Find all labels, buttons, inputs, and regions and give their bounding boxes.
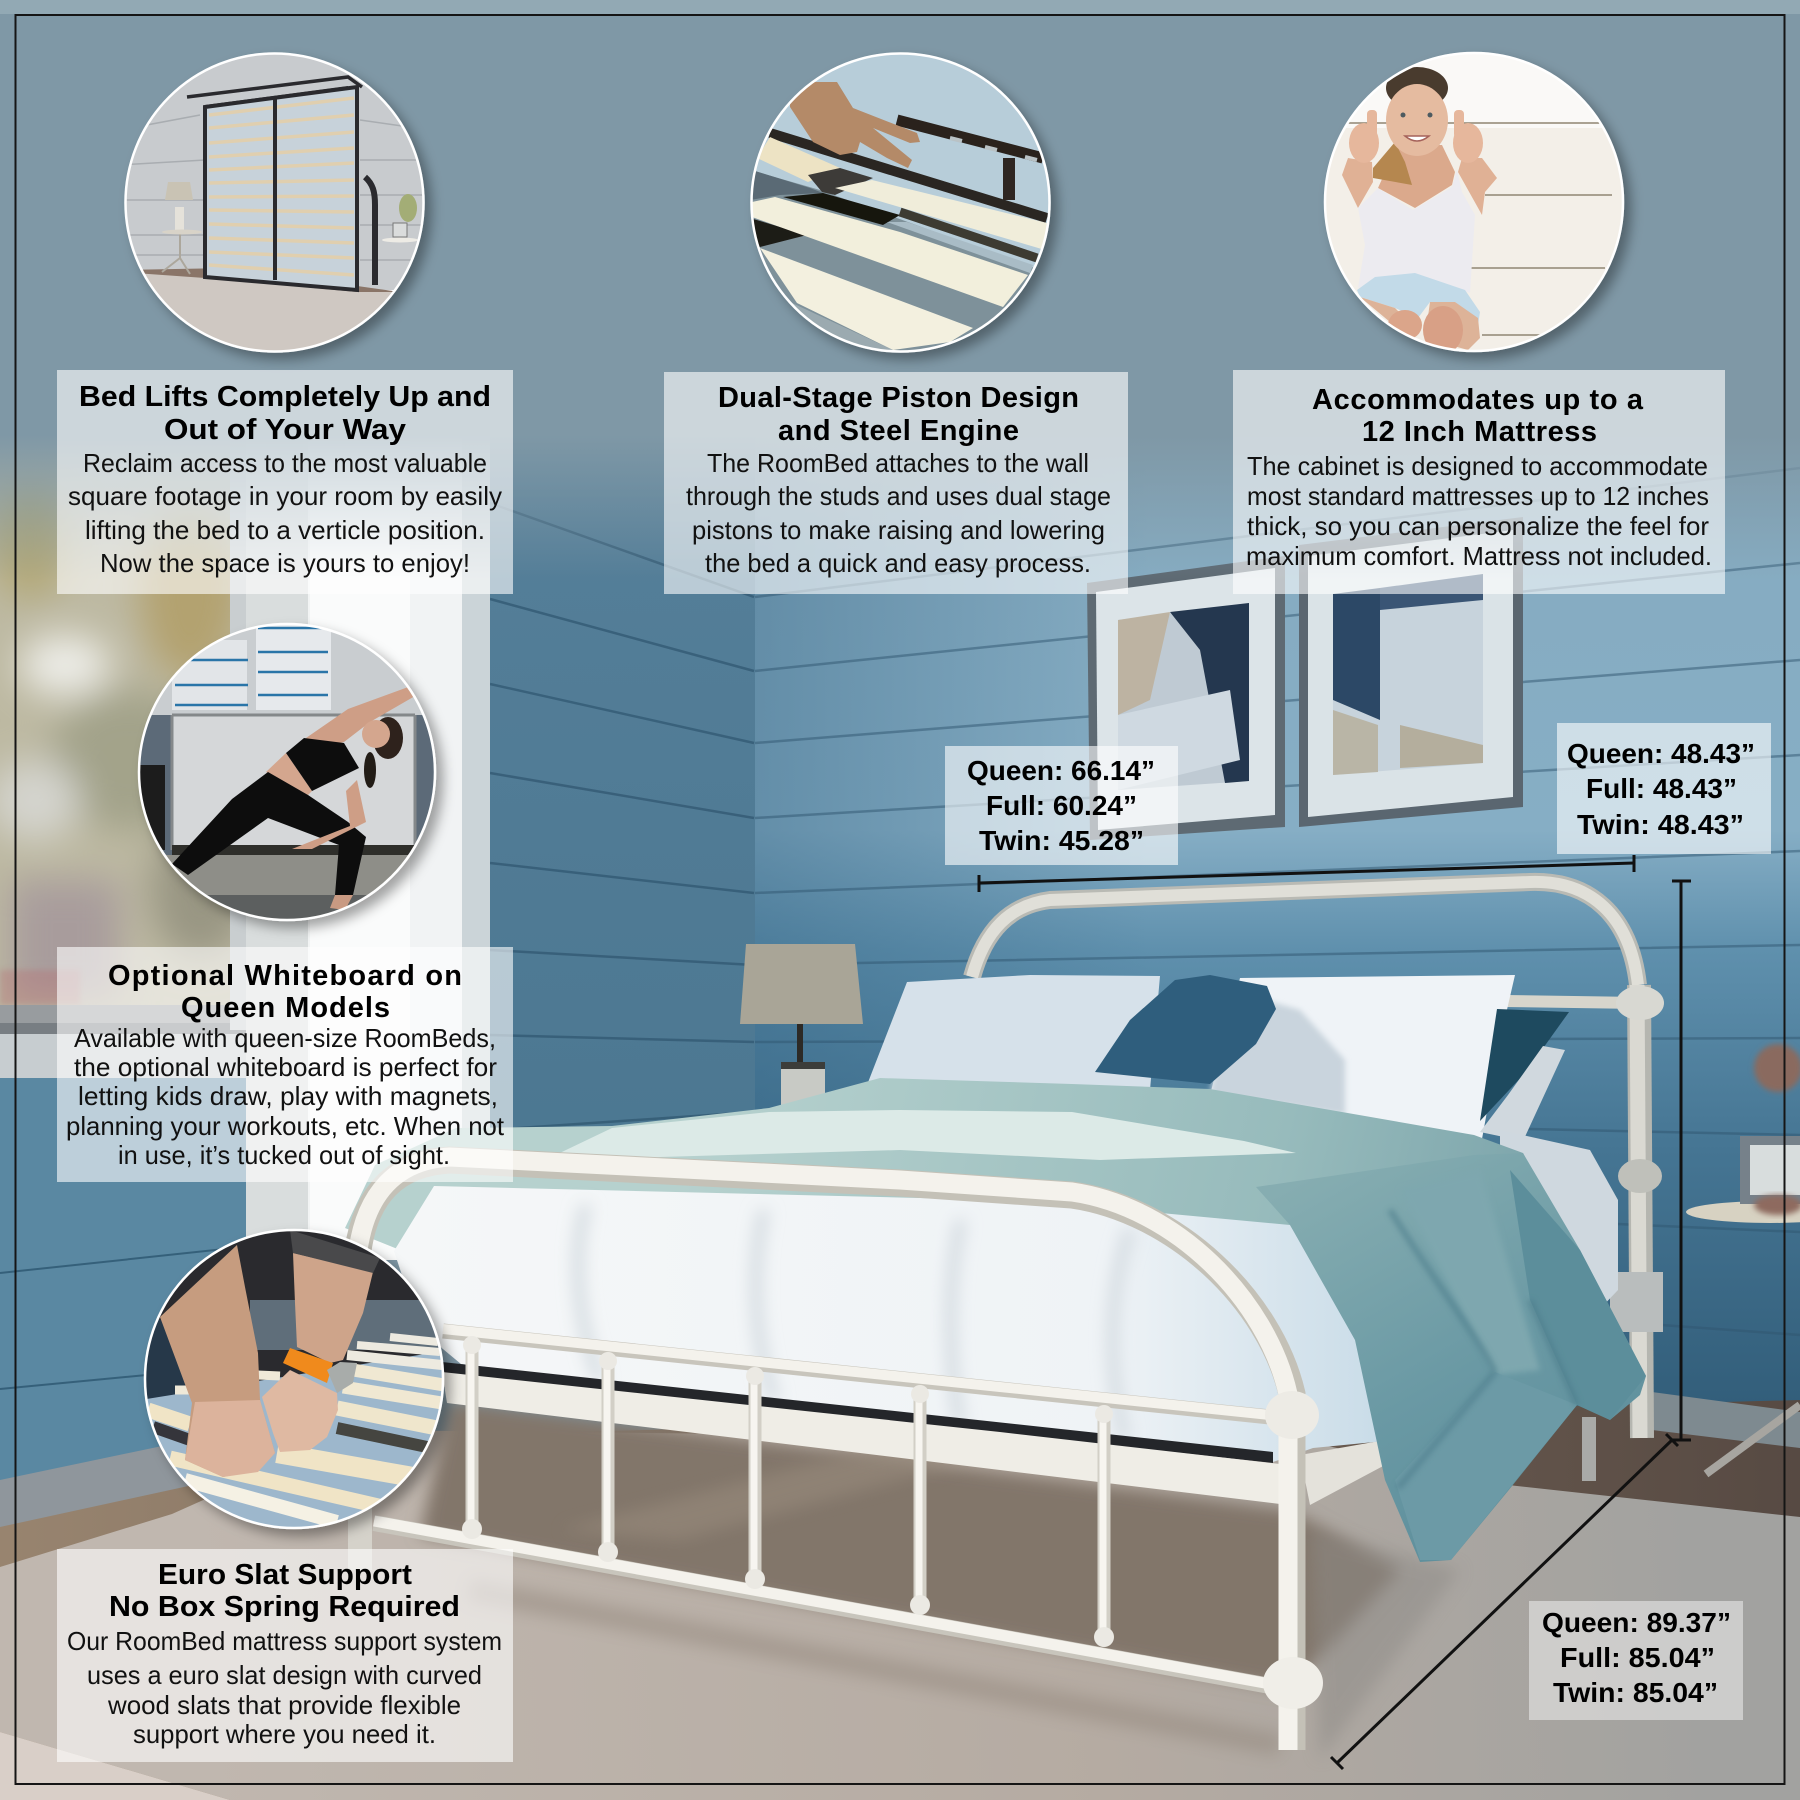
bed side plate right xyxy=(1300,1440,1385,1505)
curtain xyxy=(246,430,490,1260)
dimension label: width: Queen: 66.14” xyxy=(967,755,1155,786)
heading: euro slat support xyxy=(109,1559,460,1623)
circle photo: woman stretching at whiteboard xyxy=(135,620,440,930)
heading: bed lifts xyxy=(79,381,491,446)
window with blurred trees xyxy=(0,454,230,1005)
body text: dual-stage piston: through the studs and uses dual stage xyxy=(686,481,1111,511)
dimension line: height xyxy=(1672,881,1691,1440)
headboard xyxy=(972,882,1664,1481)
body text: optional whiteboard: letting kids draw, play with magnets, xyxy=(78,1081,498,1111)
comforter top xyxy=(520,1110,1296,1172)
white duvet xyxy=(394,1186,1395,1462)
body text: euro slat support: uses a euro slat design with curved xyxy=(87,1660,482,1690)
dimension label: width xyxy=(945,746,1178,865)
mattress side xyxy=(1500,1130,1618,1330)
body text: optional whiteboard: planning your workouts, etc. When not xyxy=(66,1111,505,1141)
body text: euro slat support: Our RoomBed mattress support system xyxy=(67,1626,502,1656)
body text: bed lifts: square footage in your room by easily xyxy=(68,481,502,511)
body text: euro slat support: wood slats that provide flexible xyxy=(107,1690,461,1720)
circle photo: hands pressing euro slats xyxy=(140,1225,450,1535)
table lamp xyxy=(740,944,863,1106)
dimension label: length xyxy=(1529,1601,1743,1720)
footboard xyxy=(348,1157,1323,1750)
dimension line: length xyxy=(1331,1434,1678,1769)
heading: 12 inch mattress: Accommodates up to a xyxy=(1312,384,1644,416)
body text: optional whiteboard: the optional whiteboard is perfect for xyxy=(74,1052,497,1082)
heading: bed lifts: Out of Your Way xyxy=(164,414,406,446)
floor and rug xyxy=(0,1400,1800,1800)
lower wall under window xyxy=(0,1078,262,1498)
window sill xyxy=(0,430,250,1079)
panel: bed lifts xyxy=(57,370,513,594)
body text: bed lifts: lifting the bed to a verticle position. xyxy=(85,515,485,545)
body text: optional whiteboard: in use, it’s tucked out of sight. xyxy=(118,1140,450,1170)
circle photo: bed lifted against wall xyxy=(120,50,430,360)
body text: euro slat support xyxy=(67,1626,502,1749)
body text: 12 inch mattress: most standard mattresses up to 12 inches xyxy=(1247,481,1709,511)
heading: euro slat support: No Box Spring Required xyxy=(109,1591,460,1623)
top colour fade overlay xyxy=(0,400,1800,580)
dimension label: height: Full: 48.43” xyxy=(1586,773,1737,804)
dimension label: height: Twin: 48.43” xyxy=(1577,809,1744,840)
body text: dual-stage piston: the bed a quick and easy process. xyxy=(705,548,1091,578)
body text: bed lifts: Reclaim access to the most valuable xyxy=(83,448,487,478)
dimension label: height: Queen: 48.43” xyxy=(1567,738,1755,769)
heading: dual-stage piston: Dual-Stage Piston Design xyxy=(718,382,1079,414)
heading: 12 inch mattress xyxy=(1312,384,1644,448)
panel: optional whiteboard xyxy=(57,947,513,1182)
dimension label: length: Queen: 89.37” xyxy=(1542,1607,1731,1638)
body text: 12 inch mattress: maximum comfort. Mattress not included. xyxy=(1246,541,1712,571)
circle photo: woman with mattress thumbs up xyxy=(1320,50,1630,360)
panel: 12 inch mattress xyxy=(1233,370,1725,594)
heading: optional whiteboard: Optional Whiteboard on xyxy=(108,960,462,992)
teal throw blanket top xyxy=(345,1078,1560,1250)
teal drape xyxy=(1256,1153,1646,1562)
heading: optional whiteboard: Queen Models xyxy=(181,992,390,1024)
body text: 12 inch mattress xyxy=(1246,451,1712,571)
side table and decor xyxy=(1686,1044,1800,1474)
framed art right xyxy=(1299,517,1523,827)
body text: optional whiteboard: Available with queen-size RoomBeds, xyxy=(74,1023,496,1053)
body text: dual-stage piston: The RoomBed attaches to the wall xyxy=(707,448,1089,478)
heading: 12 inch mattress: 12 Inch Mattress xyxy=(1362,416,1597,448)
dimension line: width xyxy=(979,855,1634,892)
heading: euro slat support: Euro Slat Support xyxy=(158,1559,412,1591)
body text: 12 inch mattress: The cabinet is designed to accommodate xyxy=(1247,451,1708,481)
body text: dual-stage piston: pistons to make raising and lowering xyxy=(692,515,1105,545)
framed art left xyxy=(1087,556,1285,840)
panel: dual-stage piston xyxy=(664,372,1128,594)
dimension label: length: Twin: 85.04” xyxy=(1553,1677,1718,1708)
body text: bed lifts: Now the space is yours to enjoy! xyxy=(100,548,470,578)
dimension label: width: Twin: 45.28” xyxy=(979,825,1144,856)
body text: 12 inch mattress: thick, so you can personalize the feel for xyxy=(1247,511,1709,541)
body text: bed lifts xyxy=(68,448,502,578)
dimension label: length: Full: 85.04” xyxy=(1560,1642,1715,1673)
body text: dual-stage piston xyxy=(686,448,1111,578)
bed side rail xyxy=(442,1362,1280,1504)
baseboards xyxy=(0,1392,1800,1527)
dimension label: width: Full: 60.24” xyxy=(986,790,1137,821)
dimension label: height xyxy=(1557,723,1771,854)
pillows xyxy=(867,975,1569,1150)
heading: dual-stage piston xyxy=(718,382,1079,447)
heading: optional whiteboard xyxy=(108,960,462,1024)
heading: bed lifts: Bed Lifts Completely Up and xyxy=(79,381,491,413)
body text: optional whiteboard xyxy=(66,1023,505,1170)
panel: euro slat support xyxy=(57,1549,513,1762)
left wall xyxy=(486,400,756,1300)
heading: dual-stage piston: and Steel Engine xyxy=(778,415,1019,447)
circle photo: piston and slats close-up xyxy=(750,50,1050,360)
right wall xyxy=(755,400,1800,1440)
body text: euro slat support: support where you need it. xyxy=(133,1719,436,1749)
